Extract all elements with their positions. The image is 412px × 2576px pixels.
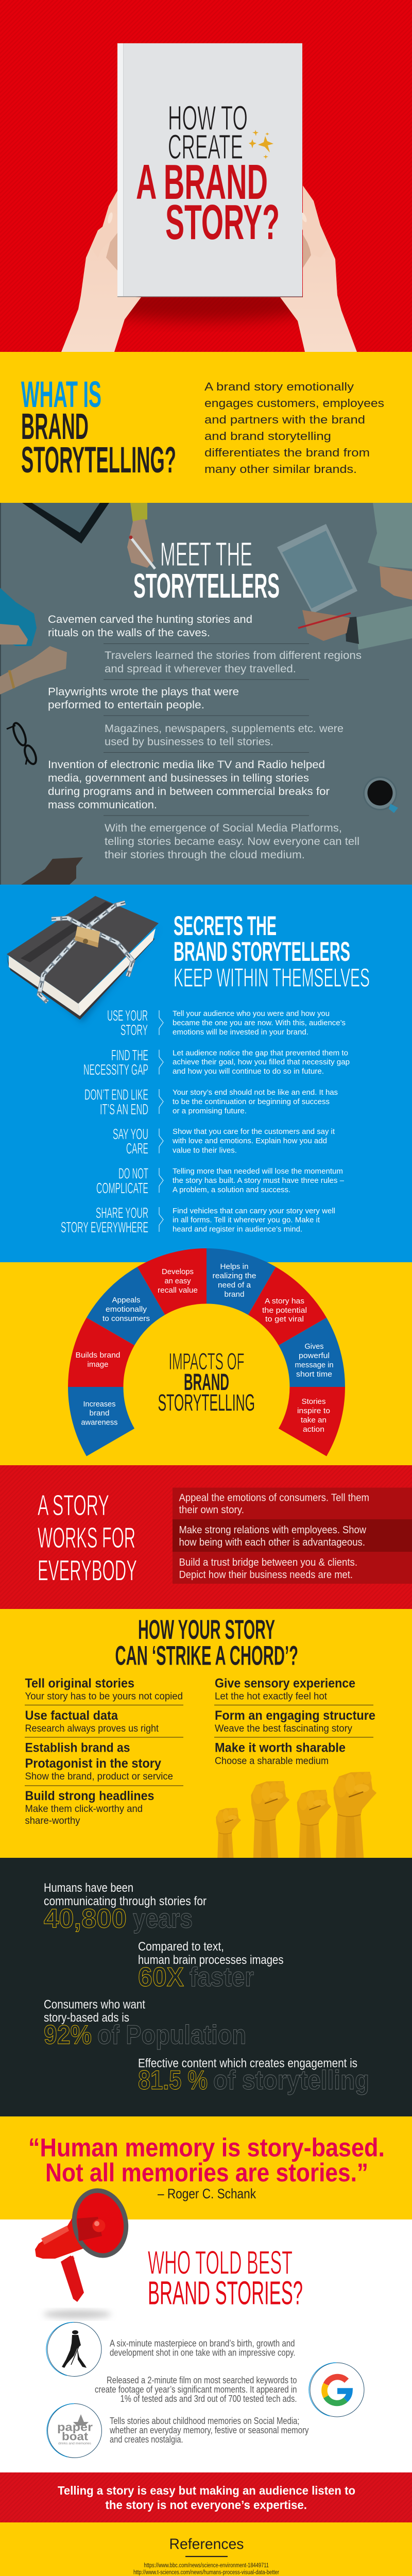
row: share your story everywhere: SHARE YOUR [96,1205,148,1222]
stat: 60X faster: faster [190,1962,254,1992]
story: johnnie walker: A six-minute masterpiece on brand’s birth, growth and [110,2338,295,2348]
chart: impacts wheel: powerful [299,1352,330,1360]
panel: strike a chord [0,1609,412,1858]
text block: and brand storytelling [204,430,331,443]
row: do not complicate: COMPLICATE [96,1180,148,1197]
text block: and partners with the brand [204,413,365,426]
tips: right column: Let the hot exactly feel hot [215,1691,328,1702]
timeline text: rituals on the walls of the caves. [48,626,210,639]
tips: right column [214,1676,375,1767]
story: paper boat [47,2403,309,2458]
heading [148,2244,303,2311]
quote attribution: – Roger C. Schank [158,2186,256,2201]
chart: impacts wheel: Develops [162,1268,194,1276]
tips: left column: Research always proves us right [25,1723,159,1734]
tips: right column: Make it worth sharable [215,1740,346,1755]
tips: left column: Use factual data [25,1708,118,1723]
chart: impacts wheel: to consumers [102,1315,150,1323]
heading: BRAND [184,1369,229,1395]
reference links: https://www.bbc.com/news/science-environment-18449711 [144,2563,269,2569]
book cover [117,43,302,297]
chart: impacts wheel: Builds brand [75,1351,121,1360]
story: google: create footage of year’s significant moments. It appeared in [95,2384,297,2395]
stat: 92% of population: of Population [97,2020,246,2050]
row: find the necessity gap: and how you will continue to do so in future. [173,1067,324,1076]
icon: coffee cup [363,776,398,813]
timeline text: Travelers learned the stories from different regions [105,649,362,662]
panel: references [0,2522,412,2576]
text block: A brand story emotionally [204,380,354,393]
text block: Build a trust bridge between you & clients. [179,1556,357,1568]
text block: Appeal the emotions of consumers. Tell them [179,1492,369,1503]
stat: 81.5 % of storytelling [138,2057,369,2095]
chart: impacts wheel: inspire to [297,1407,330,1415]
chart: impacts wheel: Gives [305,1343,323,1351]
tips: right column: Give sensory experience [215,1676,355,1691]
icon: paper boat logo [57,2414,93,2445]
icon: left arm with blue sleeve [0,588,37,646]
panel: secrets [0,885,412,1262]
timeline text: With the emergence of Social Media Platforms, [105,822,342,834]
title: HOW TO [168,99,248,138]
row: say you care: Show that you care for the customers and say it [173,1128,335,1136]
chart: impacts wheel: need of a [218,1281,251,1290]
row: do not complicate: A problem, a solution and success. [173,1186,290,1194]
stat: 40,800 years: communicating through stories for [44,1894,207,1908]
heading [115,1615,298,1671]
icon: left hand [61,191,141,352]
chart: impacts wheel: action [303,1426,324,1434]
panel: who told best brand stories [0,2219,412,2472]
icon: hand with pencil [298,606,412,650]
panel: hero [0,0,412,352]
chart: impacts wheel: message in [295,1361,334,1369]
timeline text: Magazines, newspapers, supplements etc. were [105,722,344,735]
row: share your story everywhere: Find vehicles that can carry your story very well [173,1207,335,1215]
panel: quote [0,2116,412,2219]
panel: closing statement: the story is not everyone’s expertise. [105,2498,307,2512]
timeline text: telling stories became easy. Now everyone can tell [105,835,359,848]
list of secrets [61,1008,350,1236]
panel: closing statement [0,2472,412,2522]
reference links [29,2563,384,2576]
stat: 81.5 % of storytelling: 81.5 % [138,2065,208,2095]
text block: many other similar brands. [204,463,357,476]
stat: 92% of population: story-based ads is [44,2011,129,2025]
icon: paper boat logo: paper [57,2420,93,2434]
stat: 92% of population: 92% [44,2020,92,2050]
heading [158,1348,255,1416]
heading: EVERYBODY [38,1554,137,1587]
stat: 92% of population: Consumers who want [44,1998,145,2011]
row: say you care [113,1126,335,1157]
row: don't end like it's an end: to be the continuation or beginning of success [173,1098,330,1106]
text block: how being with each other is advantageous. [179,1536,365,1548]
tips: left column: Tell original stories [25,1676,134,1691]
story: google: 1% of tested ads and 3rd out of 700 tested tech ads. [121,2394,297,2404]
row: use your story: emotions will be invested in your brand. [173,1028,308,1037]
text block: Depict how their business needs are met. [179,1569,353,1581]
timeline text: mass communication. [48,799,157,811]
chart: impacts wheel: A story has [265,1297,304,1306]
chart: impacts wheel: take an [301,1416,327,1425]
row: say you care: value to their lives. [173,1147,237,1155]
heading: HOW YOUR STORY [138,1615,275,1645]
icon: locked book [5,896,160,1023]
story: paper boat: Tells stories about childhood memories on Social Media; [110,2416,300,2426]
icon: right hand [280,185,357,352]
heading: WORKS FOR [38,1521,135,1554]
chart: impacts wheel: brand [90,1410,109,1418]
timeline text: Cavemen carved the hunting stories and [48,613,252,625]
icon: paper boat logo: boat [62,2430,89,2443]
story: google: Released a 2-minute film on most searched keywords to [107,2375,297,2385]
timeline text: during programs and in between commercial breaks for [48,785,330,798]
heading: BRAND [21,406,89,447]
row: use your story: STORY [121,1022,148,1039]
quote text [28,2133,385,2187]
quote text: Not all memories are stories.” [45,2158,368,2187]
icon: left arm with bracelet [0,646,67,694]
chart: impacts wheel: an easy [165,1277,191,1285]
timeline text: Playwrights wrote the plays that were [48,685,239,698]
heading [38,1489,137,1587]
timeline text: used by businesses to tell stories. [105,736,273,748]
row: say you care: SAY YOU [113,1126,148,1143]
row: share your story everywhere: STORY EVERYWHERE [61,1219,148,1236]
panel: what is brand storytelling [0,352,412,503]
reference links: http://www.t-sciences.com/news/humans-process-visual-data-better [133,2570,279,2576]
row: share your story everywhere: heard and register in audience’s mind. [173,1225,302,1233]
text block: engages customers, employees [204,397,384,410]
chart: impacts wheel: image [88,1361,108,1369]
row: find the necessity gap: Let audience notice the gap that prevented them to [173,1049,348,1057]
bars [173,1488,412,1584]
icon: glasses [7,721,38,766]
stat: 40,800 years: Humans have been [44,1881,133,1895]
row: do not complicate: Telling more than needed will lose the momentum [173,1167,343,1176]
chart: impacts wheel: Appeals [112,1296,140,1304]
panel: meet the storytellers [0,503,412,885]
row: don't end like it's an end: DON’T END LIKE [84,1087,148,1104]
heading [174,911,370,992]
row: say you care: with love and emotions. Explain how you add [172,1137,327,1145]
stat: 60X faster: 60X [138,1962,184,1992]
tips: left column: Establish brand as [25,1740,130,1755]
stat: 60X faster [138,1940,283,1992]
heading: SECRETS THE [174,911,277,941]
text block [204,380,384,476]
timeline text: and spread it wherever they travelled. [105,663,296,675]
tips: left column: Protagonist in the story [25,1756,161,1771]
row: use your story: Tell your audience who you were and how you [173,1010,330,1018]
row: do not complicate: the story has built. A story must have three rules – [173,1177,345,1185]
chart: impacts wheel: brand [225,1291,244,1299]
chart: impacts wheel: Increases [83,1400,115,1409]
tips: right column: Choose a sharable medium [215,1756,329,1767]
icon: megaphone [35,2183,134,2318]
heading: STORYTELLING [158,1389,255,1416]
timeline text: Invention of electronic media like TV and Radio helped [48,758,325,771]
chart: impacts wheel [68,1248,345,1456]
row: find the necessity gap [83,1047,350,1078]
icon: top right hand [368,503,412,600]
heading: A STORY [38,1489,109,1522]
icon: raised fists [216,1772,376,1858]
row: find the necessity gap: FIND THE [111,1047,148,1064]
stat: 81.5 % of storytelling: Effective content which creates engagement is [138,2057,357,2070]
row: don't end like it's an end [84,1087,338,1118]
chart: impacts wheel: emotionally [106,1306,147,1314]
row: don't end like it's an end: Your story’s end should not be like an end. It has [173,1089,338,1097]
tips: left column: Build strong headlines [25,1789,154,1803]
chart: impacts wheel: recall value [158,1286,198,1295]
panel: impacts of brand storytelling [0,1248,412,1465]
chart: impacts wheel: Stories [302,1398,325,1406]
stat: 92% of population [44,1998,246,2050]
timeline text: their stories through the cloud medium. [105,849,305,861]
story: google [95,2363,364,2417]
text block: their own story. [179,1504,244,1516]
story: johnnie walker: development shot in one take with an impressive copy. [110,2347,296,2358]
stat: 40,800 years: years [133,1904,193,1934]
text block: Make strong relations with employees. Show [179,1524,366,1536]
story: johnnie walker [46,2322,296,2376]
title [136,99,280,250]
icon: stars [249,130,273,159]
row: use your story: became the one you are now. With this, audience’s [173,1019,346,1027]
row: do not complicate [96,1165,345,1197]
tips: right column: Form an engaging structure [215,1708,375,1723]
heading: IMPACTS OF [169,1348,244,1375]
timeline text: performed to entertain people. [48,699,204,711]
heading: WHAT IS [21,375,101,415]
tips: left column: Show the brand, product or service [25,1771,173,1782]
panel: a story works for everybody [0,1465,412,1609]
tips: left column: Make them click-worthy and [25,1804,143,1815]
icon: striding man [62,2330,87,2368]
tips: left column: Your story has to be yours not copied [25,1691,183,1702]
story: paper boat: and creates nostalgia. [110,2434,183,2445]
chart: impacts wheel: the potential [262,1307,307,1315]
chart: impacts wheel: realizing the [212,1272,256,1280]
stat: 40,800 years: 40,800 [44,1904,127,1934]
row: share your story everywhere: in all forms. Tell it wherever you go. Make it [173,1216,320,1224]
stat: 40,800 years [44,1881,207,1934]
panel: statistics [0,1858,412,2116]
stat: 60X faster: human brain processes images [138,1953,283,1967]
chart: impacts wheel: awareness [81,1419,117,1427]
heading: WHO TOLD BEST [148,2244,293,2281]
chart: impacts wheel: Helps in [220,1263,248,1271]
row: use your story: USE YOUR [107,1008,148,1024]
title: CREATE [168,128,243,166]
row: find the necessity gap: NECESSITY GAP [83,1062,148,1078]
heading [133,535,280,605]
icon: hand with pen [127,503,155,569]
panel: closing statement: Telling a story is easy but making an audience listen to [58,2484,355,2497]
chart: impacts wheel: short time [296,1370,332,1379]
row: say you care: CARE [126,1141,148,1157]
title: A BRAND [136,155,268,210]
chart: impacts wheel: to get viral [265,1315,304,1324]
row: find the necessity gap: achieve their goal, how you filled that necessity gap [173,1058,350,1066]
icon: white tablet [277,524,357,614]
row: use your story [107,1008,346,1039]
row: don't end like it's an end: IT’S AN END [100,1101,148,1118]
heading [21,375,176,481]
heading: STORYTELLERS [133,567,280,605]
icon: dark tablet [22,503,109,544]
tips: left column [25,1676,183,1826]
stat: 60X faster: Compared to text, [138,1940,224,1954]
text block: differentiates the brand from [204,446,370,459]
timeline text: media, government and businesses in telling stories [48,772,309,784]
icon: pointing hand [21,857,83,885]
heading: STORYTELLING? [21,440,176,481]
text block [179,1492,369,1581]
row: share your story everywhere [61,1205,335,1236]
row: don't end like it's an end: or a promising future. [173,1107,247,1115]
stat: 81.5 % of storytelling: of storytelling [213,2065,369,2095]
story: paper boat: whether an everyday memory, festive or seasonal memory [109,2425,309,2435]
tips: left column: share-worthy [25,1816,80,1826]
tips: right column: Weave the best fascinating story [215,1723,352,1734]
heading: References [169,2536,244,2552]
icon: paper boat logo: drinks and memories [58,2442,91,2445]
icon: google G [324,2377,350,2403]
heading: MEET THE [160,535,252,573]
row: do not complicate: DO NOT [118,1165,148,1182]
title: STORY? [165,195,280,250]
timeline text [48,613,362,861]
